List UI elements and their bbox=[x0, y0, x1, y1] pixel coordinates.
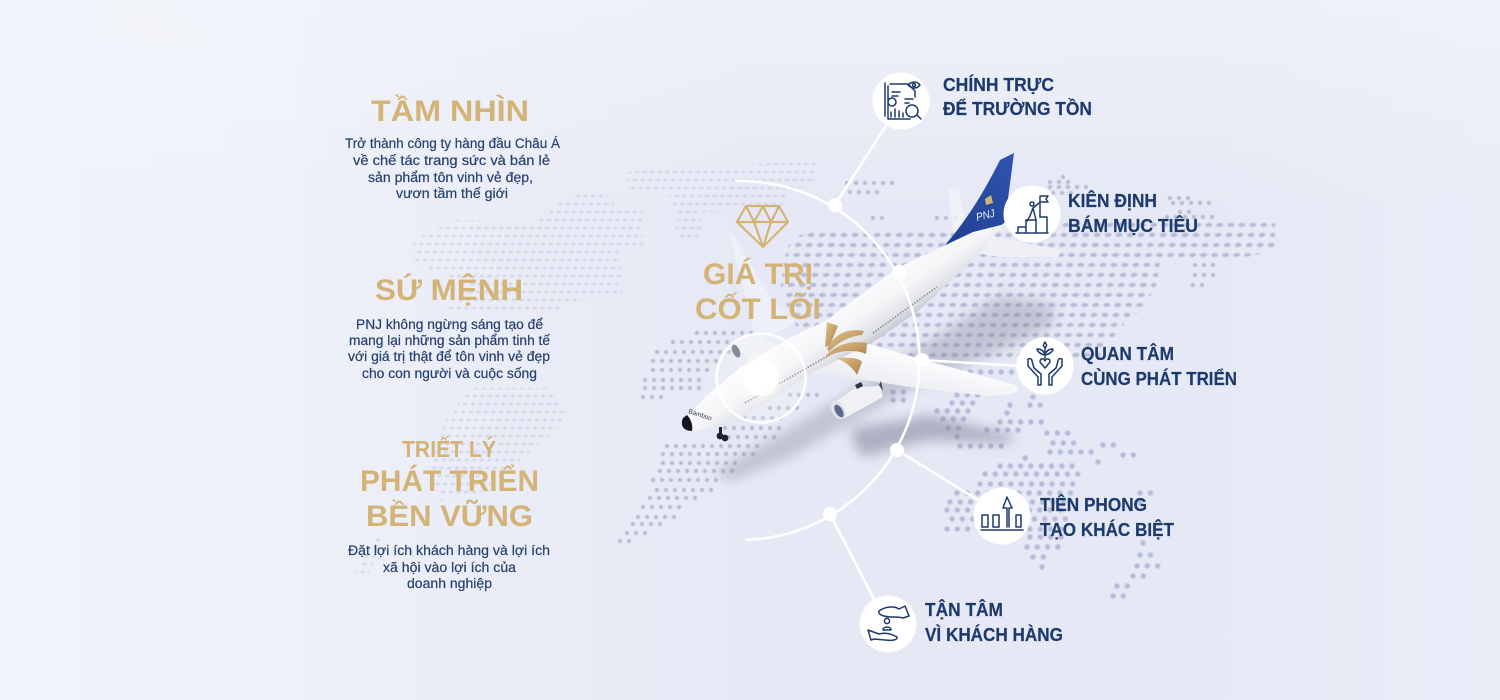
heading: Triết lý phát triển bền vững: BỀN VỮNG bbox=[366, 499, 533, 533]
fuselage bbox=[683, 224, 1005, 432]
icon: hands with plant bbox=[1016, 338, 1074, 394]
windows bbox=[745, 287, 937, 403]
value: Kiên định bbox=[1004, 186, 1198, 242]
text: Tầm nhìn body: vươn tầm thế giới bbox=[396, 186, 508, 201]
near wing bbox=[813, 343, 1018, 396]
connector to Quan tâm bbox=[922, 360, 1020, 366]
dotted world map bbox=[355, 160, 1275, 596]
label bbox=[943, 74, 1092, 119]
label: ĐỂ TRƯỜNG TỒN bbox=[943, 98, 1092, 119]
text: Tầm nhìn body: về chế tác trang sức và bán lẻ bbox=[353, 153, 550, 168]
near engine bbox=[827, 381, 883, 422]
label: KIÊN ĐỊNH bbox=[1068, 190, 1157, 211]
radar glow on fuselage bbox=[716, 334, 806, 422]
icon: climber with flag bbox=[1004, 186, 1060, 242]
text: Sứ mệnh body bbox=[348, 317, 550, 381]
icon: diamond bbox=[737, 206, 788, 247]
label bbox=[1081, 343, 1237, 389]
panel: left column mission texts bbox=[345, 94, 560, 591]
value: Tận tâm bbox=[860, 596, 1063, 652]
label bbox=[925, 599, 1063, 645]
label: TẠO KHÁC BIỆT bbox=[1040, 519, 1174, 540]
cockpit nose bbox=[682, 415, 692, 431]
tail fin bbox=[935, 153, 1014, 256]
label: QUAN TÂM bbox=[1081, 343, 1174, 364]
text: Sứ mệnh body: mang lại những sản phẩm tinh tế bbox=[349, 333, 550, 348]
text: Sứ mệnh body: với giá trị thật để tôn vinh vẻ đẹp bbox=[348, 349, 550, 364]
label: VÌ KHÁCH HÀNG bbox=[925, 624, 1063, 645]
connector to Chính trực bbox=[835, 124, 887, 205]
airline name: Bamboo bbox=[687, 408, 713, 423]
plane shadow bbox=[715, 296, 1056, 482]
gear bbox=[717, 427, 728, 441]
text: Triết lý body: doanh nghiệp bbox=[407, 576, 492, 591]
text: Tầm nhìn body: Trở thành công ty hàng đầu Châu Á bbox=[345, 136, 560, 151]
text: Triết lý body: xã hội vào lợi ích của bbox=[383, 560, 517, 575]
near tail stabilizer bbox=[968, 232, 1062, 257]
text: Sứ mệnh body: PNJ không ngừng sáng tạo để bbox=[356, 317, 543, 332]
heading: Giá trị cốt lõi: GIÁ TRỊ bbox=[703, 257, 813, 291]
text: Triết lý body: Đặt lợi ích khách hàng và lợi ích bbox=[348, 543, 550, 558]
label bbox=[1068, 190, 1198, 236]
icon: bars with up arrow bbox=[974, 488, 1030, 544]
heading: Triết lý phát triển bền vững bbox=[360, 435, 539, 533]
connector to Tận tâm bbox=[830, 514, 876, 603]
heading: Sứ mệnh: SỨ MỆNH bbox=[375, 273, 523, 307]
text: Tầm nhìn body bbox=[345, 136, 560, 201]
heading: Giá trị cốt lõi: CỐT LÕI bbox=[695, 292, 821, 326]
heading: Triết lý phát triển bền vững: TRIẾT LÝ bbox=[402, 435, 496, 462]
heading: Tầm nhìn: TẦM NHÌN bbox=[371, 94, 529, 128]
label: CÙNG PHÁT TRIỂN bbox=[1081, 368, 1237, 389]
label bbox=[1040, 494, 1174, 540]
label: BÁM MỤC TIÊU bbox=[1068, 215, 1198, 236]
heading: Triết lý phát triển bền vững: PHÁT TRIỂN bbox=[360, 464, 539, 498]
icon: report with magnifier bbox=[872, 72, 930, 130]
text: Tầm nhìn body: sản phẩm tôn vinh vẻ đẹp, bbox=[368, 170, 533, 185]
heading: Giá trị cốt lõi bbox=[695, 257, 821, 326]
far wing bbox=[729, 234, 795, 345]
connection nodes bbox=[823, 198, 929, 521]
gold feather livery bbox=[825, 322, 867, 375]
value: Chính trực bbox=[872, 72, 1092, 130]
text: Triết lý body bbox=[348, 543, 550, 591]
left engine bbox=[730, 335, 780, 372]
label: CHÍNH TRỰC bbox=[943, 74, 1054, 95]
network arc with nodes and connectors bbox=[735, 124, 1020, 603]
text: Sứ mệnh body: cho con người và cuộc sống bbox=[362, 366, 537, 381]
icon: hands around customer bbox=[860, 596, 916, 652]
value: Tiên phong bbox=[974, 488, 1174, 544]
tail fin: PNJ bbox=[975, 208, 997, 224]
value: Quan tâm bbox=[1016, 338, 1237, 394]
airplane bbox=[682, 153, 1062, 441]
label: TẬN TÂM bbox=[925, 599, 1003, 620]
label: TIÊN PHONG bbox=[1040, 494, 1147, 515]
connector to Tiên phong bbox=[897, 450, 978, 500]
far tail stabilizer bbox=[948, 188, 968, 240]
